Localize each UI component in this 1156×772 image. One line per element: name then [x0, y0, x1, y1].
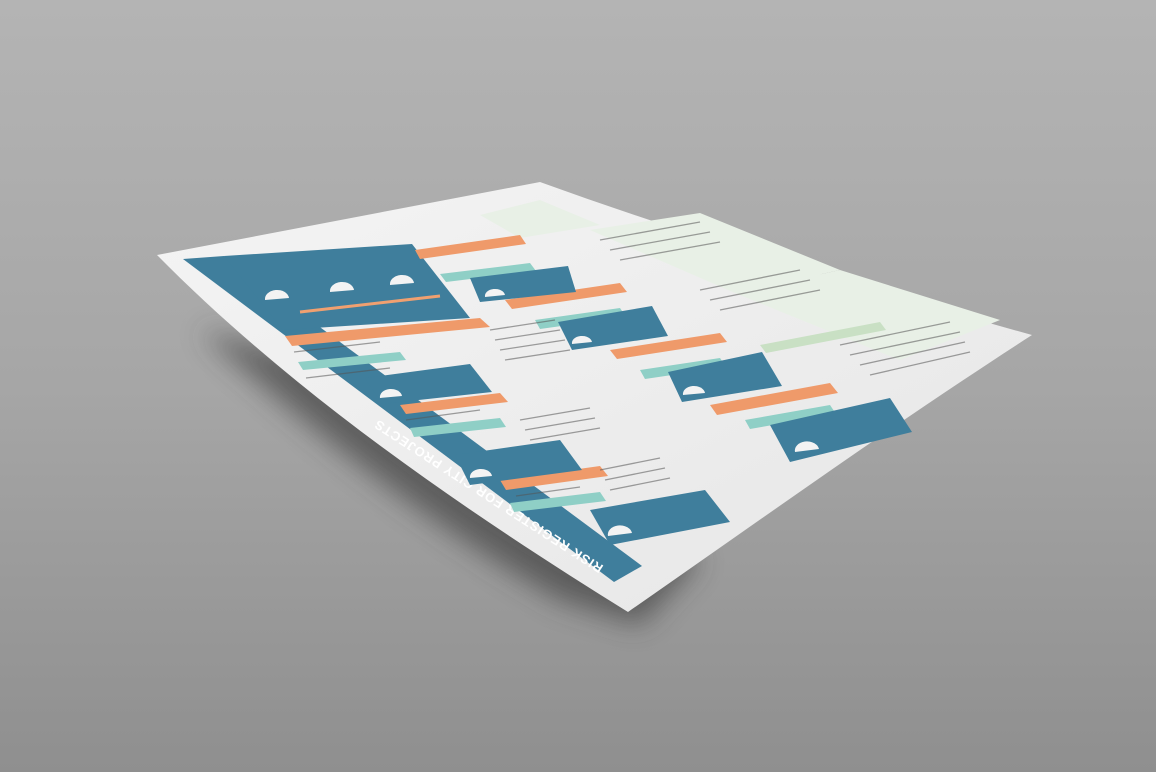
shadow	[200, 330, 700, 625]
title strip	[183, 256, 642, 582]
blue gauge panels	[365, 266, 912, 545]
title strip: RISK REGISTER FOR CITY PROJECTS	[371, 417, 606, 576]
text lines	[294, 222, 970, 496]
paper	[157, 182, 1032, 612]
header block	[224, 244, 470, 330]
green column tints	[480, 200, 1000, 360]
orange/teal label bars	[285, 235, 886, 512]
gauges	[380, 289, 819, 536]
